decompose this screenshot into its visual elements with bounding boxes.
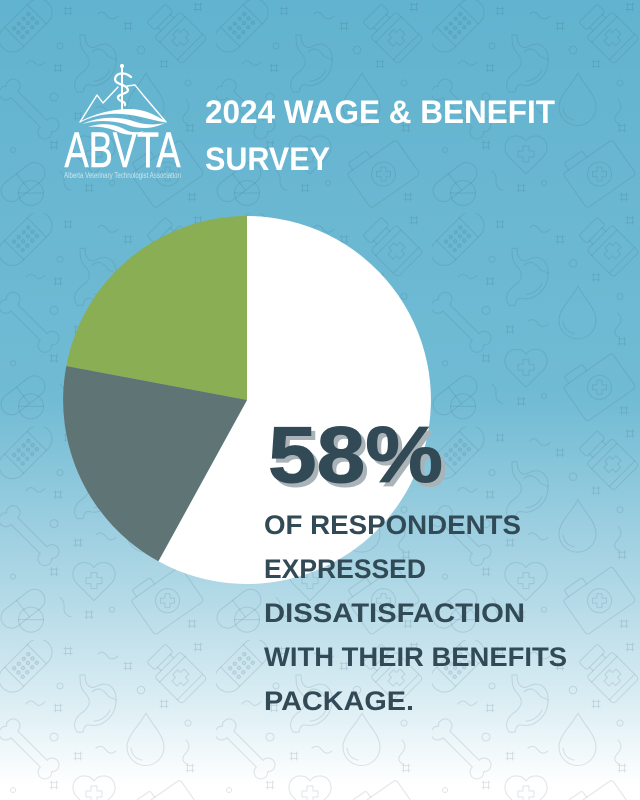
description text: EXPRESSED — [264, 554, 426, 584]
description text: DISSATISFACTION — [264, 598, 525, 628]
title: 2024 WAGE & BENEFIT — [205, 94, 555, 130]
slice: green — [66, 216, 247, 400]
description text — [264, 510, 567, 716]
logo: ABVTA — [64, 64, 181, 180]
slice: grey — [63, 366, 247, 561]
description text: WITH THEIR BENEFITS — [264, 642, 567, 672]
title: SURVEY — [205, 141, 330, 177]
title — [205, 94, 555, 177]
big number: 58%: 58% — [268, 410, 443, 499]
logo wordmark: ABVTA — [64, 122, 181, 178]
description text: PACKAGE. — [264, 686, 414, 716]
logo tagline: Alberta Veterinary Technologist Association — [64, 171, 181, 180]
big number: 58%: 58% — [272, 414, 447, 503]
description text: OF RESPONDENTS — [264, 510, 521, 540]
logo icon: mountain and rod of Asclepius — [80, 64, 166, 135]
pie chart — [63, 216, 431, 584]
slice: 58% dissatisfied (white) — [158, 216, 431, 584]
